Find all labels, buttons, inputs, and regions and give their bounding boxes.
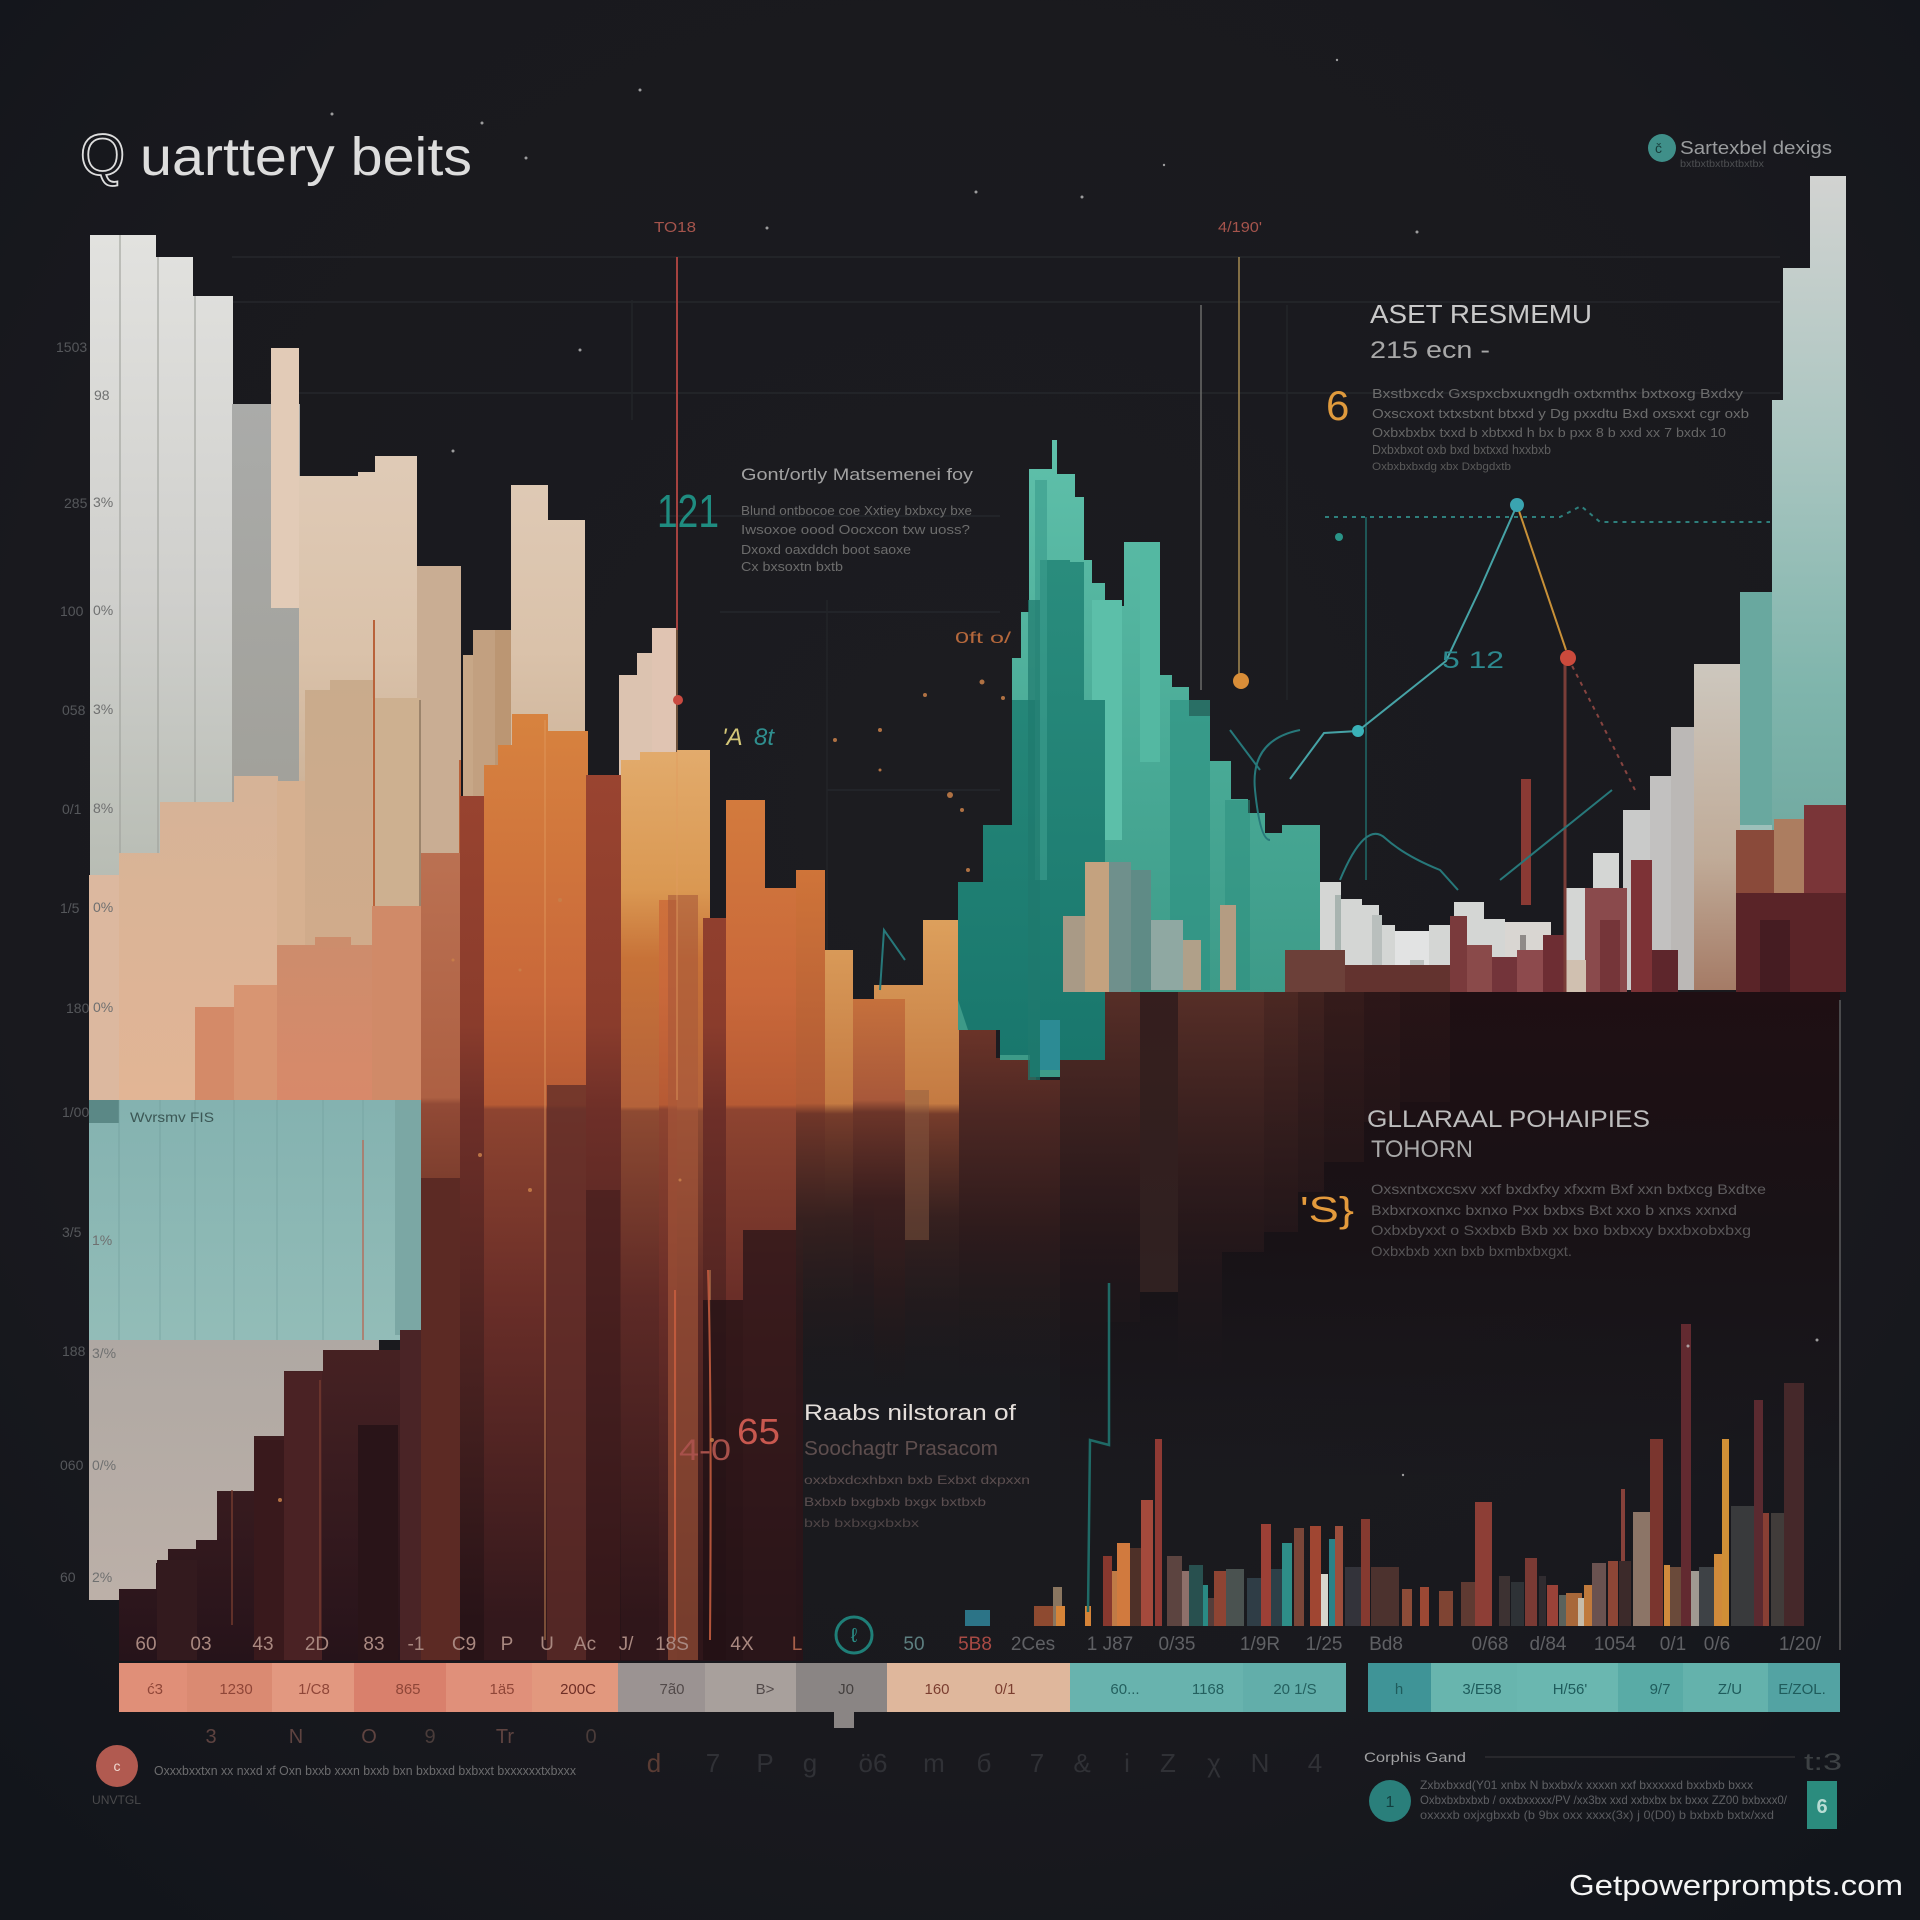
callout: 65: oxxbxdcxhbxn bxb Exbxt dxpxxn xyxy=(804,1473,1030,1487)
callout: 121: Gont/ortly Matsemenei foy xyxy=(741,465,974,484)
marker label left: TO18 xyxy=(654,219,696,236)
quarter band left: J0 xyxy=(838,1681,854,1698)
teal line chart xyxy=(880,498,1770,992)
legend icons row: P xyxy=(756,1748,774,1778)
maroon skyline bars xyxy=(1285,805,1846,992)
legend icons row: Z xyxy=(1160,1748,1176,1778)
legend icons row xyxy=(647,1748,1322,1778)
note bottom right: 6 xyxy=(1816,1796,1828,1818)
callout: global policies: GLLARAAL POHAIPIES xyxy=(1367,1106,1650,1133)
callout: global policies xyxy=(1300,1106,1766,1259)
quarter band left: 160 xyxy=(924,1681,950,1698)
quarter band right: E/ZOL. xyxy=(1778,1681,1826,1698)
callout: global policies: Oxbxbxb xxn bxb bxmbxbxgxt. xyxy=(1371,1243,1572,1259)
x axis labels: 1054 xyxy=(1594,1634,1637,1655)
x axis labels: 0/68 xyxy=(1472,1634,1508,1655)
vertical teal line xyxy=(1365,517,1367,880)
x axis labels: 1/9R xyxy=(1240,1634,1280,1655)
axis values left: 3% xyxy=(93,701,113,717)
callout: asset resume: Oxbxbxbx txxd b xbtxxd h bx b pxx 8 b xxd xx 7 bxdx 10 xyxy=(1372,425,1726,440)
orange marker xyxy=(1233,673,1249,689)
axis values left: 180 xyxy=(66,1000,90,1016)
beige columns xyxy=(271,348,676,1066)
title text: uarttery beits xyxy=(140,127,472,187)
callout: 65: Soochagtr Prasacom xyxy=(804,1438,998,1460)
callout: asset resume: Bxstbxcdx Gxspxcbxuxngdh oxtxmthx bxtxoxg Bxdxy xyxy=(1372,386,1744,401)
callout: 65: Raabs nilstoran of xyxy=(804,1400,1017,1425)
x axis labels: 43 xyxy=(252,1634,274,1655)
quarter band right xyxy=(1368,1663,1840,1712)
quarter band right: H/56' xyxy=(1553,1681,1587,1698)
speckles xyxy=(330,59,1818,1476)
axis values left: 058 xyxy=(62,702,86,718)
orange data line xyxy=(1517,505,1566,650)
legend glyph row: Tr xyxy=(496,1726,514,1748)
callout: 65: 65 xyxy=(737,1411,780,1452)
beige inset columns xyxy=(1063,862,1236,992)
legend glyph row: 3 xyxy=(205,1726,217,1748)
legend glyph row: 9 xyxy=(424,1726,436,1748)
quarter band left: B> xyxy=(756,1681,775,1698)
right frame line xyxy=(1839,1000,1841,1650)
dark teal centre xyxy=(958,480,1250,1080)
x axis labels: 50 xyxy=(903,1634,925,1655)
dark staircase columns xyxy=(119,1100,803,1661)
quarter band right: Z/U xyxy=(1718,1681,1742,1698)
axis values left: 8% xyxy=(93,800,113,816)
dashed top line xyxy=(1325,506,1770,522)
callout: 121: Dxoxd oaxddch boot saoxe xyxy=(741,542,911,557)
axis values left xyxy=(56,339,116,1585)
red bar xyxy=(1521,779,1531,905)
small bar chart bottom right xyxy=(965,1324,1804,1626)
title xyxy=(80,123,472,188)
callout: 65: Bxbxb bxgbxb bxgx bxtbxb xyxy=(804,1495,986,1509)
title letter Q: Q xyxy=(80,123,125,188)
annotation lines and markers xyxy=(654,219,1262,705)
quarter band left: 0/1 xyxy=(995,1681,1015,1698)
x axis labels: J/ xyxy=(619,1634,634,1655)
teal mountain chart xyxy=(958,440,1320,1080)
axis values left: 188 xyxy=(62,1343,86,1359)
legend icons row: m xyxy=(923,1748,945,1778)
legend icons row: g xyxy=(803,1748,817,1778)
legend note bottom left xyxy=(92,1745,576,1807)
brand badge top right: č xyxy=(1655,140,1662,156)
teal panel label: Wvrsmv FIS xyxy=(130,1109,214,1125)
note bottom right: Corphis Gand xyxy=(1364,1749,1466,1765)
callout: 121 xyxy=(657,465,974,574)
x axis labels: 1/25 xyxy=(1306,1634,1342,1655)
callout: asset resume: 215 ecn - xyxy=(1370,337,1490,364)
legend icons row: 7 xyxy=(706,1748,720,1778)
axis values left: 1% xyxy=(92,1232,112,1248)
callout: global policies: 'S} xyxy=(1300,1189,1354,1230)
red dot xyxy=(673,695,683,705)
callout: global policies: Oxsxntxcxcsxv xxf bxdxfxy xfxxm Bxf xxn bxtxcg Bxdtxe xyxy=(1371,1181,1766,1197)
x axis labels: C9 xyxy=(452,1634,476,1655)
axis values left: 3/% xyxy=(92,1345,116,1361)
white columns xyxy=(90,235,300,996)
note bottom right: Oxbxbxbxbxb / oxxbxxxxx/PV /xx3bx xxd xxbxbx bx bxxx ZZ00 bxbxxx0/ xyxy=(1420,1793,1788,1807)
x axis labels: -1 xyxy=(408,1634,424,1655)
legend note bottom left: UNVTGL xyxy=(92,1793,141,1807)
callout: 65 xyxy=(679,1400,1030,1530)
dark column stripes xyxy=(157,1330,422,1660)
legend icons row: N xyxy=(1251,1748,1269,1778)
legend icons row: & xyxy=(1073,1748,1091,1778)
axis values left: 0/1 xyxy=(62,801,82,817)
quarter band left xyxy=(119,1663,1346,1728)
x axis labels: 60 xyxy=(135,1634,157,1655)
callout: 121: Blund ontbocoe coe Xxtiey bxbxcy bxe xyxy=(741,503,972,518)
callout: asset resume: ASET RESMEMU xyxy=(1370,299,1592,329)
red guide line xyxy=(676,257,678,630)
legend glyph row xyxy=(205,1726,597,1748)
tall right columns xyxy=(1623,176,1846,990)
red dashed line xyxy=(1568,658,1635,790)
note bottom right xyxy=(1364,1749,1842,1829)
legend icons row: χ xyxy=(1207,1748,1221,1778)
orange columns xyxy=(421,520,803,1660)
axis values left: 285 xyxy=(64,495,88,511)
axis values left: 2% xyxy=(92,1569,112,1585)
axis values left: 0% xyxy=(93,602,113,618)
x axis labels: U xyxy=(540,1634,554,1655)
axis values left: 0% xyxy=(93,999,113,1015)
legend glyph row: O xyxy=(361,1726,377,1748)
note bottom right: 1 xyxy=(1386,1794,1395,1811)
legend icons row: 4 xyxy=(1308,1748,1322,1778)
chart grid lines xyxy=(232,257,1780,1000)
legend glyph row: 0 xyxy=(585,1726,597,1748)
brand badge top right xyxy=(1648,134,1832,170)
white skyline bars xyxy=(1320,853,1619,988)
lower dark column overlays xyxy=(586,1190,620,1660)
brand badge top right: bxtbxtbxtbxtbxtbx xyxy=(1680,159,1764,170)
right white and maroon skyline xyxy=(1285,176,1846,992)
teal scribble xyxy=(880,730,1612,990)
callout: asset resume: Oxscxoxt txtxstxnt btxxd y Dg pxxdtu Bxd oxsxxt cgr oxb xyxy=(1372,406,1749,421)
axis values left: 98 xyxy=(94,387,110,403)
grey lower columns xyxy=(89,1340,379,1600)
red vertical stem xyxy=(1564,660,1566,992)
callout: global policies: Oxbxbyxxt o Sxxbxb Bxb xx bxo bxbxxy bxxbxobxbxg xyxy=(1371,1222,1751,1238)
quarter band left: ć3 xyxy=(147,1681,163,1698)
teal data line xyxy=(1290,505,1517,779)
x axis labels: P xyxy=(501,1634,513,1655)
teal vertical stem xyxy=(1088,1283,1109,1612)
scatter label teal: 8t xyxy=(754,724,775,751)
callout: asset resume xyxy=(1326,299,1749,473)
x axis labels: 0/6 xyxy=(1704,1634,1730,1655)
x axis labels: 0/1 xyxy=(1660,1634,1686,1655)
icon: teal globe xyxy=(836,1617,872,1653)
quarter band right: 9/7 xyxy=(1650,1681,1670,1698)
watermark: Getpowerprompts.com xyxy=(1569,1870,1903,1902)
scatter label orange: 0ft o/ xyxy=(955,630,1012,647)
brand badge top right: Sartexbel dexigs xyxy=(1680,138,1832,158)
x axis labels: d/84 xyxy=(1530,1634,1567,1655)
callout: asset resume: Dxbxbxot oxb bxd bxtxxd hxxbxb xyxy=(1372,442,1551,457)
legend glyph row: N xyxy=(289,1726,303,1748)
x axis labels: Ac xyxy=(574,1634,596,1655)
legend icons row: б xyxy=(977,1748,991,1778)
peach columns xyxy=(89,620,460,1111)
teal silhouette columns xyxy=(958,440,1320,1077)
x axis labels: 4X xyxy=(730,1634,754,1655)
axis values left: 060 xyxy=(60,1457,84,1473)
scatter label teal xyxy=(722,724,775,751)
quarter band left: 1/C8 xyxy=(298,1681,330,1698)
axis values left: 0/% xyxy=(92,1457,116,1473)
orange stair columns fading down xyxy=(796,870,1060,1400)
axis values left: 3% xyxy=(93,494,113,510)
legend icons row: i xyxy=(1124,1748,1130,1778)
callout: global policies: TOHORN xyxy=(1371,1136,1473,1163)
orange guide line xyxy=(1238,257,1240,680)
x axis labels: 03 xyxy=(190,1634,212,1655)
note bottom right: Zxbxbxxd(Y01 xnbx N bxxbx/x xxxxn xxf bxxxxxd bxxbxb bxxx xyxy=(1420,1778,1753,1792)
quarter band left: 1230 xyxy=(219,1681,253,1698)
quarter band right: h xyxy=(1395,1681,1403,1698)
x axis labels: L xyxy=(792,1634,802,1655)
axis values left: 1/00 xyxy=(62,1104,89,1120)
x axis labels: 83 xyxy=(363,1634,385,1655)
dark lower-right panel xyxy=(1060,992,1840,1480)
quarter band left: 7ã0 xyxy=(659,1681,685,1698)
callout: global policies: Bxbxrxoxnxc bxnxo Pxx bxbxs Bxt xxo b xnxs xxnxd xyxy=(1371,1202,1737,1218)
data dots xyxy=(1510,498,1524,512)
callout: 121: 121 xyxy=(657,485,719,537)
quarter band right: 3/E58 xyxy=(1462,1681,1502,1698)
note bottom right: t:3 xyxy=(1804,1749,1842,1776)
grey guide lines xyxy=(1200,305,1202,690)
callout: 121: Cx bxsoxtn bxtb xyxy=(741,559,843,574)
callout: 65: 4-0 xyxy=(679,1434,731,1467)
axis values left: 100 xyxy=(60,603,84,619)
axis values left: 1/5 xyxy=(60,900,80,916)
legend note bottom left: c xyxy=(114,1758,120,1774)
callout: 65: bxb bxbxgxbxbx xyxy=(804,1516,919,1530)
callout: asset resume: Oxbxbxbxdg xbx Dxbgdxtb xyxy=(1372,461,1511,473)
quarter band left: 1168 xyxy=(1192,1681,1224,1698)
legend icons row: ö6 xyxy=(859,1748,887,1778)
quarter band left: 20 1/S xyxy=(1273,1681,1317,1698)
salmon columns xyxy=(195,906,422,1102)
callout: 5 12: 5 12 xyxy=(1442,647,1504,674)
legend icons row: 7 xyxy=(1030,1748,1044,1778)
left stacked column chart xyxy=(89,235,803,1661)
teal panel xyxy=(89,1100,422,1345)
x axis labels: 1/20/ xyxy=(1779,1634,1822,1655)
quarter band left: 1ä5 xyxy=(489,1681,515,1698)
legend icons row: d xyxy=(647,1748,661,1778)
axis values left: 0% xyxy=(93,899,113,915)
callout: asset resume: 6 xyxy=(1326,382,1349,429)
quarter band left: 60... xyxy=(1110,1681,1140,1698)
legend note bottom left: Oxxxbxxtxn xx nxxd xf Oxn bxxb xxxn bxxb bxn bxbxxd bxbxxt bxxxxxxtxbxxx xyxy=(154,1763,576,1778)
callout: 121: Iwsoxoe oood Oocxcon txw uoss? xyxy=(741,522,970,537)
scatter label teal: 'A xyxy=(722,724,743,751)
icon: teal globe: ℓ xyxy=(851,1625,858,1647)
marker label right: 4/190' xyxy=(1218,219,1262,236)
x axis labels: 2D xyxy=(305,1634,329,1655)
x axis labels: 2Ces xyxy=(1011,1634,1055,1655)
axis values left: 1503 xyxy=(56,339,87,355)
quarter band left: 200C xyxy=(560,1681,596,1698)
note bottom right: oxxxxb oxjxgbxxb (b 9bx oxx xxxx(3x) j 0(D0) b bxbxb bxtx/xxd xyxy=(1420,1808,1774,1822)
x axis labels: 0/35 xyxy=(1159,1634,1195,1655)
x axis labels: Bd8 xyxy=(1369,1634,1403,1655)
x axis labels: 18S xyxy=(655,1634,689,1655)
axis values left: 3/5 xyxy=(62,1224,82,1240)
axis values left: 60 xyxy=(60,1569,76,1585)
x axis labels: 5B8 xyxy=(958,1634,992,1655)
quarter band left: 865 xyxy=(395,1681,421,1698)
x axis labels: 1 J87 xyxy=(1087,1634,1133,1655)
x axis labels xyxy=(135,1634,1822,1655)
